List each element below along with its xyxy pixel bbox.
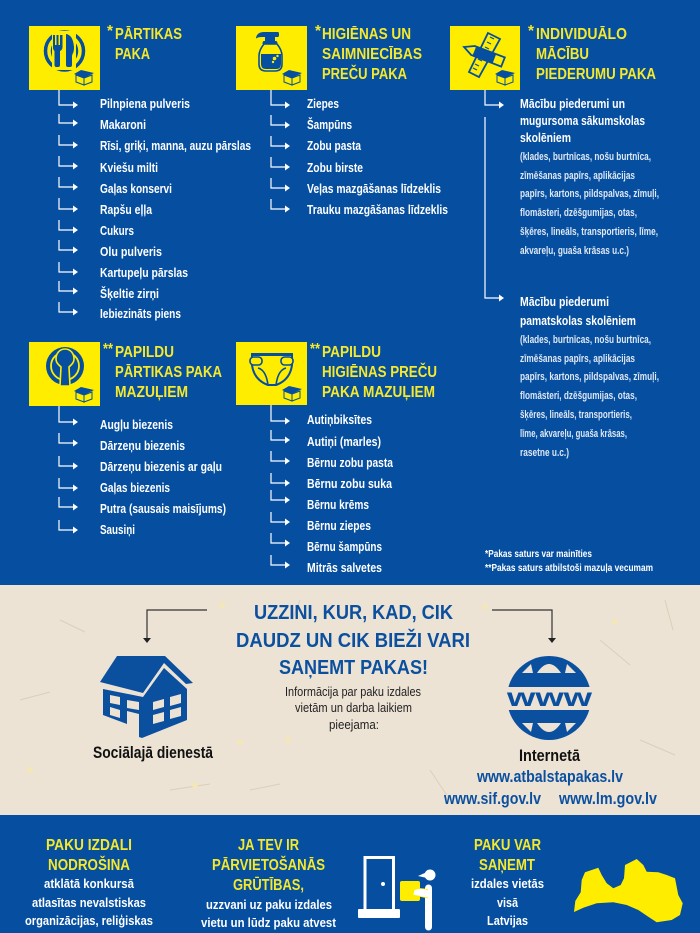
text block: primary school supplies: Mācību piederumi un — [520, 96, 625, 111]
text block: primary school supplies: (klades, burtnīcas, nošu burtnīca, — [520, 151, 651, 163]
list: food items: Olu pulveris — [100, 244, 162, 259]
list: baby food items: Putra (sausais maisījums) — [100, 501, 226, 516]
panel: hygiene package — [236, 23, 448, 217]
list: hygiene items: Trauku mazgāšanas līdzeklis — [307, 202, 448, 217]
text block: internet links: Internetā — [519, 747, 581, 765]
list: baby food items: Augļu biezenis — [100, 417, 173, 432]
heading: baby food package: PĀRTIKAS PAKA — [115, 364, 222, 381]
text block: primary school supplies — [520, 96, 659, 257]
text block: mobility difficulties: GRŪTĪBAS, — [233, 877, 304, 894]
heading: find out: SAŅEMT PAKAS! — [279, 656, 428, 679]
heading: hygiene package: SAIMNIECĪBAS — [322, 46, 422, 63]
text block: internet links: www.lm.gov.lv — [558, 790, 658, 808]
panel: where to find out — [0, 585, 700, 815]
text block: basic school supplies: šķēres, lineāls, transportieris, — [520, 409, 632, 421]
text block: where to receive: PAKU VAR — [474, 837, 541, 854]
text block: distribution provided by: PAKU IZDALI — [46, 837, 132, 854]
text block: information: Informācija par paku izdales — [285, 685, 421, 699]
text block: distribution provided by: NODROŠINA — [48, 856, 130, 874]
list: food items: Cukurs — [100, 223, 134, 238]
list: food items: Kviešu milti — [100, 160, 158, 175]
icon: courier at door — [358, 858, 436, 927]
heading: hygiene package: * — [315, 23, 322, 40]
list: baby hygiene items: Autiņi (marles) — [307, 434, 381, 449]
panel: food package — [29, 23, 251, 321]
heading: hygiene package — [315, 23, 422, 83]
text block: basic school supplies: zīmēšanas papīrs, aplikācijas — [520, 353, 635, 365]
text block: primary school supplies: mugursoma sākumskolas — [520, 113, 645, 128]
arrows: school supplies — [485, 90, 500, 298]
text block: basic school supplies: (klades, burtnīcas, nošu burtnīca, — [520, 334, 651, 346]
list: food items: Rīsi, griķi, manna, auzu pārslas — [100, 138, 251, 153]
heading: food package — [107, 23, 182, 63]
list: baby hygiene items: Bērnu ziepes — [307, 518, 371, 533]
list: baby food items: Sausiņi — [100, 522, 135, 537]
text block: distribution provided by: organizācijas, reliģiskas — [25, 913, 153, 928]
text block: basic school supplies: līme, akvareļu, guaša krāsas, — [520, 428, 627, 440]
icon: map of Latvia — [574, 859, 683, 922]
text block: basic school supplies: Mācību piederumi — [520, 294, 609, 309]
icon: baby spoon on plate — [29, 342, 100, 406]
list: hygiene items: Zobu birste — [307, 160, 363, 175]
text block: mobility difficulties: PĀRVIETOŠANĀS — [212, 856, 325, 874]
panel: baby hygiene package — [236, 341, 437, 575]
footnotes — [485, 548, 653, 574]
arrow: to social service — [143, 610, 207, 643]
icon: globe www: www — [506, 684, 593, 712]
list: food items: Makaroni — [100, 117, 146, 132]
heading: school supplies package: INDIVIDUĀLO — [536, 26, 627, 43]
heading: baby food package: MAZUĻIEM — [115, 384, 188, 401]
list: baby food items: Gaļas biezenis — [100, 480, 170, 495]
heading: baby hygiene package: HIGIĒNAS PREČU — [322, 363, 437, 381]
heading: school supplies package — [528, 23, 656, 83]
footnotes: *Pakas saturs var mainīties — [485, 548, 592, 560]
list: hygiene items — [271, 90, 448, 217]
heading: hygiene package: HIGIĒNAS UN — [322, 26, 411, 43]
heading: hygiene package: PREČU PAKA — [322, 65, 407, 83]
list: baby hygiene items: Autiņbiksītes — [307, 412, 372, 427]
list: food items: Rapšu eļļa — [100, 202, 153, 217]
list: baby hygiene items: Mitrās salvetes — [307, 560, 382, 575]
panel: baby food package — [29, 341, 226, 537]
list: baby food items: Dārzeņu biezenis ar gaļu — [100, 459, 222, 474]
icon: globe www — [505, 656, 593, 740]
heading: baby hygiene package — [310, 341, 437, 401]
text block: primary school supplies: zīmēšanas papīrs, aplikācijas — [520, 170, 635, 182]
icon: soap dispenser — [236, 26, 307, 90]
list: baby hygiene items: Bērnu krēms — [307, 497, 369, 512]
text block: primary school supplies: skolēniem — [520, 130, 571, 145]
text block: primary school supplies: šķēres, lineāls, transportieris, līme, — [520, 226, 658, 238]
text block: mobility difficulties: JA TEV IR — [238, 837, 299, 854]
text block: where to receive: SAŅEMT — [479, 857, 535, 874]
text block: primary school supplies: akvareļu, guaša krāsas u.c.) — [520, 245, 629, 257]
list: food items: Gaļas konservi — [100, 181, 172, 196]
list: food items — [59, 90, 251, 321]
heading: baby food package — [103, 341, 222, 401]
text block: where to receive: Latvijas — [487, 913, 528, 928]
heading: school supplies package: MĀCĪBU — [536, 46, 589, 63]
text block: information: pieejama: — [329, 718, 379, 732]
text block: where to receive: visā — [497, 895, 519, 910]
text block: information: vietām un darba laikiem — [295, 701, 412, 715]
text block: basic school supplies — [520, 294, 659, 459]
list: food items: Šķeltie zirņi — [100, 286, 159, 301]
list: baby hygiene items: Bērnu šampūns — [307, 539, 382, 554]
text block: mobility difficulties: uzzvani uz paku izdales — [206, 897, 332, 912]
icon: diaper — [236, 342, 307, 405]
list: hygiene items: Veļas mazgāšanas līdzeklis — [307, 181, 441, 196]
list: baby food items: Dārzeņu biezenis — [100, 438, 185, 453]
text block: mobility difficulties: vietu un lūdz paku atvest — [201, 915, 337, 930]
list: hygiene items: Zobu pasta — [307, 138, 362, 153]
heading: baby hygiene package: PAKA MAZUĻIEM — [322, 384, 435, 401]
text block: where to receive — [471, 837, 544, 928]
text block: distribution provided by: atlasītas nevalstiskas — [32, 895, 146, 910]
text block: basic school supplies: papīrs, kartons, pildspalvas, zīmuļi, — [520, 371, 659, 383]
arrow: to internet — [492, 610, 556, 643]
heading: baby food package: ** — [103, 341, 114, 358]
text block: internet links: www.atbalstapakas.lv — [476, 768, 624, 786]
text block: basic school supplies: rasetne u.c.) — [520, 447, 569, 459]
heading: find out — [236, 601, 470, 679]
text block: basic school supplies: flomāsteri, dzēšgumijas, otas, — [520, 390, 637, 402]
text block: internet links: www.sif.gov.lv — [443, 790, 542, 808]
label: social service: Sociālajā dienestā — [93, 744, 214, 762]
heading: school supplies package: * — [528, 23, 535, 40]
heading: find out: DAUDZ UN CIK BIEŽI VARI — [236, 628, 470, 652]
panel: school supplies package — [450, 23, 659, 459]
text block: primary school supplies: papīrs, kartons, pildspalvas, zīmuļi, — [520, 188, 659, 200]
list: baby hygiene items — [271, 405, 394, 575]
heading: school supplies package: PIEDERUMU PAKA — [536, 66, 656, 83]
list: baby hygiene items: Bērnu zobu pasta — [307, 455, 394, 470]
icon: pencil and ruler — [450, 26, 520, 90]
icon: house — [100, 656, 193, 738]
list: hygiene items: Šampūns — [307, 117, 352, 132]
list: baby food items — [59, 406, 226, 537]
list: hygiene items: Ziepes — [307, 96, 339, 111]
list: food items: Iebiezināts piens — [100, 306, 181, 321]
text block: where to receive: izdales vietās — [471, 876, 544, 891]
heading: food package: * — [107, 23, 114, 40]
text block: mobility difficulties — [201, 837, 337, 930]
heading: food package: PAKA — [115, 46, 150, 63]
panel: bottom information band — [25, 837, 683, 930]
list: food items: Kartupeļu pārslas — [100, 265, 188, 280]
text block: information — [285, 685, 421, 732]
text block: basic school supplies: pamatskolas skolēniem — [520, 313, 636, 328]
text block: distribution provided by: atklātā konkursā — [44, 876, 135, 891]
icon: plate with cutlery — [29, 26, 100, 90]
heading: find out: UZZINI, KUR, KAD, CIK — [254, 601, 453, 624]
heading: food package: PĀRTIKAS — [115, 26, 182, 43]
heading: baby hygiene package: ** — [310, 341, 321, 358]
text block: distribution provided by — [25, 837, 153, 928]
footnotes: **Pakas saturs atbilstoši mazuļa vecumam — [485, 562, 653, 574]
list: food items: Pilnpiena pulveris — [100, 96, 190, 111]
text block: primary school supplies: flomāsteri, dzēšgumijas, otas, — [520, 207, 637, 219]
heading: baby hygiene package: PAPILDU — [322, 344, 381, 361]
text block: internet links — [443, 747, 658, 808]
heading: baby food package: PAPILDU — [115, 344, 174, 361]
list: baby hygiene items: Bērnu zobu suka — [307, 476, 393, 491]
